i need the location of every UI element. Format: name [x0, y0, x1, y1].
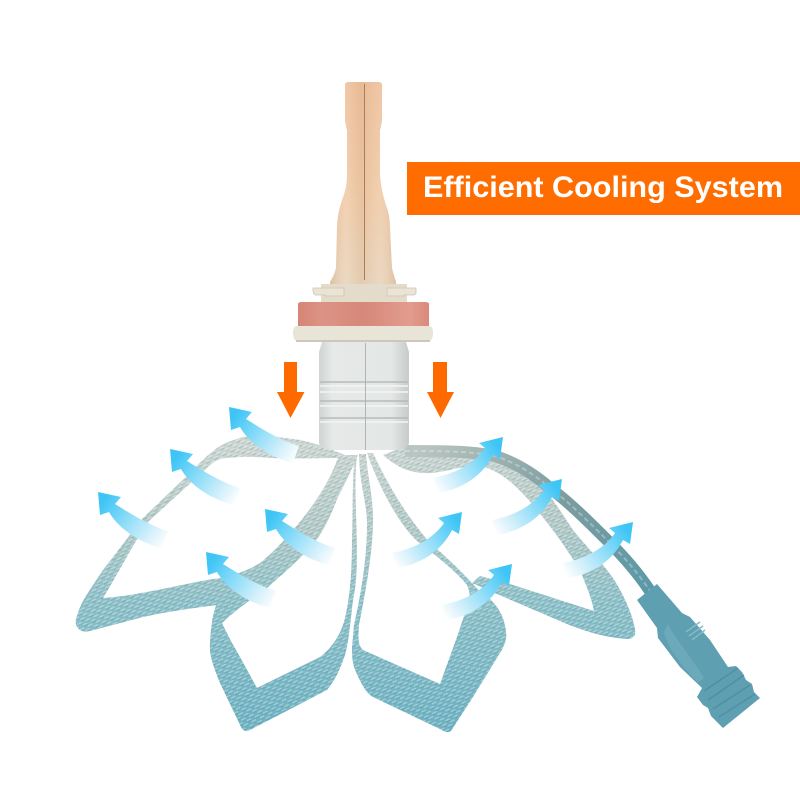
bulb collar: [321, 284, 407, 305]
shaft side shading: [330, 82, 396, 288]
blue arrow: right 2: [492, 479, 562, 535]
shaft centre seam: [364, 84, 366, 280]
blue arrow: left 1: [229, 407, 299, 463]
heat sink grooves: [320, 382, 408, 418]
blue arrow: left 5: [206, 552, 276, 608]
bulb: [293, 82, 433, 450]
blue arrow: right 3: [563, 522, 633, 578]
heat sink: [319, 342, 409, 450]
orange arrow: right airflow in: [427, 362, 454, 418]
cooling braids: [76, 436, 760, 732]
copper shaft: [330, 82, 396, 288]
blue arrow: left 2: [170, 449, 240, 505]
blue arrow: right 4: [392, 512, 462, 568]
title banner: Efficient Cooling System: [423, 171, 783, 204]
blue arrow: right 1: [433, 437, 503, 493]
red seal ring: [298, 302, 429, 328]
blue arrow: left 4: [265, 509, 335, 565]
title banner: [407, 162, 800, 215]
washer flange: [293, 326, 433, 342]
connector plug: [637, 584, 760, 728]
orange arrow: left airflow in: [277, 362, 304, 418]
bayonet tab left: [313, 288, 344, 296]
blue arrow: left 3: [98, 492, 168, 548]
blue arrow: right 5: [442, 564, 512, 620]
bayonet tab right: [387, 288, 416, 296]
braid: lower right petal: [352, 453, 506, 732]
power cable: [405, 451, 650, 591]
braid: outer left petal: [76, 436, 358, 632]
braid: lower left petal: [210, 455, 357, 731]
braid: outer right petal: [383, 447, 635, 639]
